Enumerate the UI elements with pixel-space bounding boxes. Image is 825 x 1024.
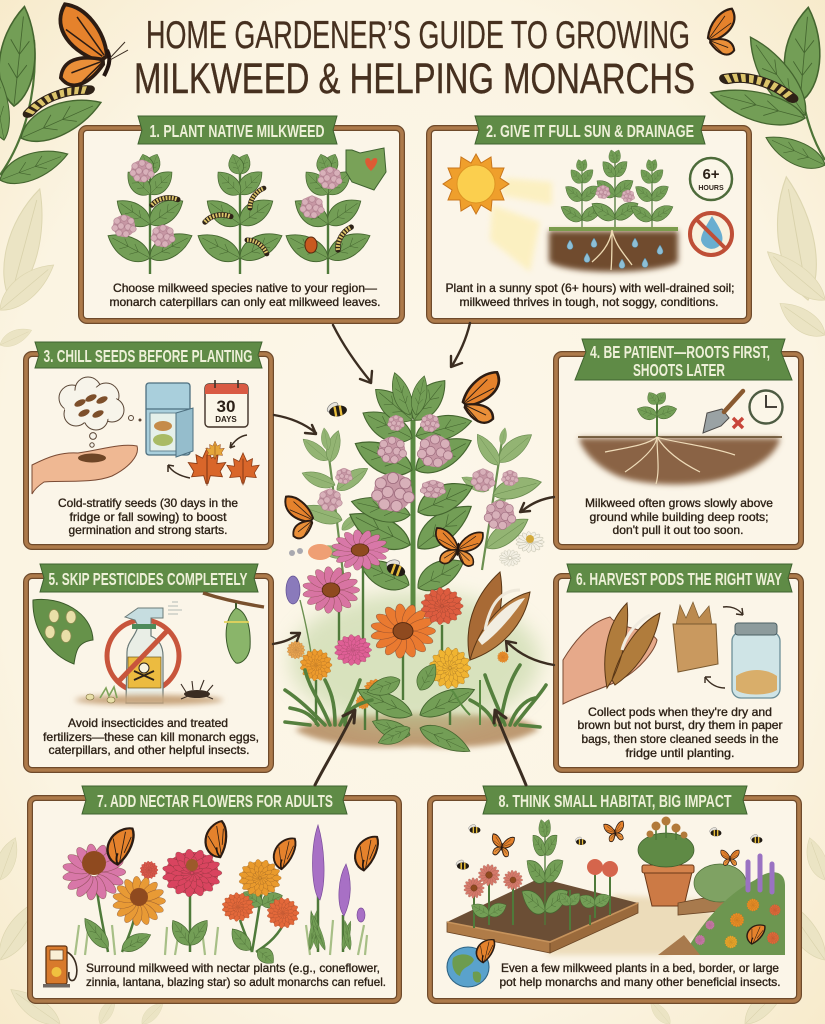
- potted flowers: [638, 816, 694, 906]
- text: step 5: caterpillars, and other helpful insects.: [48, 743, 250, 757]
- text: step 6: brown but not burst, dry them in paper: [578, 718, 782, 732]
- icon: calendar 30 days: 30: [217, 397, 235, 416]
- zinnia: [162, 849, 222, 897]
- icon: seed jar: [732, 623, 780, 698]
- text: step 5: [43, 716, 259, 757]
- milkweed plant with pods and beetle: [281, 152, 375, 274]
- heading: step 5: 5. SKIP PESTICIDES COMPLETELY: [48, 569, 248, 589]
- icon: nectar fuel pump: [43, 946, 77, 988]
- caterpillar on top-right leaf: [726, 72, 794, 98]
- text: step 4: Milkweed often grows slowly above: [585, 496, 773, 510]
- icon: refrigerator: [146, 383, 193, 457]
- heading: step 5: [40, 564, 258, 592]
- arrow: step 4 to plant: [520, 497, 554, 512]
- bees: [324, 399, 409, 579]
- text: step 4: ground while building deep roots;: [590, 510, 768, 524]
- text: step 6: bags, then store cleaned seeds in the: [582, 732, 779, 746]
- icon: hand holding pods: [563, 603, 660, 704]
- grass: [75, 920, 367, 955]
- text: step 7: [86, 961, 386, 989]
- text: step 3: fridge or fall sowing) to boost: [70, 510, 227, 524]
- milkweed plant with caterpillars: [193, 152, 287, 274]
- side milkweed plant left: [299, 427, 371, 590]
- icon: clock: [750, 390, 782, 424]
- icon: branch with chrysalis: [203, 593, 264, 663]
- icon: 6+ hours: HOURS: [698, 185, 724, 192]
- side milkweed plant right: [459, 427, 544, 570]
- soil, eggs and dead insect: [75, 680, 223, 705]
- central milkweed garden illustration: [285, 370, 546, 759]
- panel 6: harvest pods: [556, 564, 801, 770]
- orange coneflower: [370, 603, 436, 659]
- heading: step 7: [82, 786, 347, 814]
- arrow: step 7 to plant: [315, 710, 355, 785]
- nectar flower stems and leaves: [79, 887, 353, 968]
- zinnias: [334, 587, 463, 666]
- icon: calendar 30 days: DAYS: [215, 415, 237, 424]
- butterflies and bees: [455, 821, 762, 870]
- text: step 1: [110, 281, 380, 309]
- ground: [295, 713, 538, 747]
- panel 5: skip pesticides: [26, 564, 271, 770]
- arrow: step 2 to plant: [451, 323, 470, 367]
- text: step 6: Collect pods when they're dry and: [588, 705, 772, 719]
- small wildflowers left: [286, 544, 332, 660]
- text: step 2: Plant in a sunny spot (6+ hours) with well-drained soil;: [446, 281, 734, 295]
- text: step 5: Avoid insecticides and treated: [68, 716, 228, 730]
- icon: paper bag: [673, 602, 718, 672]
- heading: step 6: [567, 564, 792, 592]
- panel 4: be patient: [556, 339, 801, 547]
- icon: leaf with monarch eggs: [33, 599, 93, 664]
- open milkweed seed pod: [468, 572, 530, 660]
- heading: step 3: 3. CHILL SEEDS BEFORE PLANTING: [44, 346, 252, 366]
- background wash: [290, 592, 540, 728]
- flower stems: [316, 565, 450, 730]
- text: step 8: pot help monarchs and many other beneficial insects.: [500, 975, 780, 989]
- panel 8: small habitat: [430, 786, 799, 1001]
- text: step 8: Even a few milkweed plants in a bed, border, or large: [501, 961, 779, 975]
- text: step 1: monarch caterpillars can only eat milkweed leaves.: [110, 295, 380, 309]
- main milkweed stem and leaves: [343, 370, 479, 625]
- orange coneflower: [112, 876, 166, 926]
- monarch butterfly: top right: [702, 8, 744, 58]
- arrow: step 5 to plant: [273, 633, 300, 644]
- heading: step 3: [35, 342, 262, 368]
- text: step 8: [500, 961, 780, 989]
- text: step 3: germination and strong starts.: [68, 523, 227, 537]
- arrow: step 6 to plant: [506, 641, 554, 665]
- raised garden bed with milkweed: [447, 817, 638, 953]
- text: step 3: Cold-stratify seeds (30 days in the: [58, 496, 238, 510]
- icon: autumn leaves: [168, 435, 259, 486]
- text: step 2: milkweed thrives in tough, not soggy, conditions.: [460, 295, 718, 309]
- pink coneflowers: [302, 529, 389, 614]
- decorative milkweed leaves: top right: [707, 6, 825, 176]
- icon: hand holding seeds: [32, 445, 137, 494]
- text: step 4: don't pull it out too soon.: [612, 523, 744, 537]
- icon: calendar 30 days: [205, 380, 248, 427]
- milkweed plant with flowers: [103, 152, 197, 274]
- text: step 2: [446, 281, 734, 309]
- heading: step 8: 8. THINK SMALL HABITAT, BIG IMPACT: [498, 791, 732, 811]
- arrow: step 8 to plant: [494, 710, 526, 785]
- icon: thought bubble with seeds: [59, 377, 142, 447]
- text: step 6: fridge until planting.: [626, 746, 734, 760]
- low grass and basal leaves: [285, 660, 546, 759]
- title: [134, 14, 695, 103]
- soil with roots and seedling: [578, 389, 782, 484]
- heading: step 1: [138, 116, 337, 144]
- caterpillar on top-left leaf: [27, 84, 89, 113]
- text: step 7: Surround milkweed with nectar plants (e.g., coneflower,: [86, 961, 380, 975]
- heading: step 4: [575, 339, 792, 380]
- icon: globe: [447, 937, 495, 987]
- butterfly top right of plant: [460, 372, 505, 425]
- small red bud: [140, 861, 158, 879]
- white daisies: [499, 531, 544, 566]
- panel 2: full sun and drainage: [429, 116, 749, 321]
- text: step 1: Choose milkweed species native to your region—: [113, 281, 377, 295]
- text: step 3: [58, 496, 238, 537]
- lantana flowers: [222, 859, 299, 929]
- heading: step 8: [483, 786, 747, 814]
- text: step 5: fertilizers—these can kill monarch eggs,: [43, 730, 259, 744]
- panel 1: plant native milkweed: [81, 116, 402, 321]
- icon: trowel crossed out: [703, 391, 743, 433]
- icon: sun with rays: [443, 154, 552, 272]
- coneflower: [62, 844, 126, 900]
- garden path: [545, 895, 720, 955]
- arrow: step 3 to plant: [274, 415, 316, 434]
- monarch butterfly: top left: [44, 4, 128, 92]
- heading: step 2: 2. GIVE IT FULL SUN & DRAINAGE: [486, 121, 694, 141]
- border garden: [658, 856, 785, 955]
- heading: step 2: [475, 116, 705, 144]
- blazing star: [312, 825, 365, 922]
- text: step 6: [578, 705, 782, 760]
- icon: crossed-out pesticide spray: [107, 602, 182, 703]
- milkweed plants above soil: [558, 148, 675, 229]
- butterfly left: [285, 497, 313, 538]
- marigolds: [300, 647, 509, 709]
- soil cross-section with water drops: [549, 229, 678, 272]
- icon: no standing water: [690, 213, 732, 255]
- icon: native region map: [346, 148, 386, 190]
- heading: step 1: 1. PLANT NATIVE MILKWEED: [150, 121, 324, 141]
- panel 7: nectar flowers: [30, 786, 399, 1001]
- heading: step 4: SHOOTS LATER: [633, 360, 725, 380]
- icon: 6+ hours: 6+: [702, 166, 720, 183]
- text: step 4: [585, 496, 773, 537]
- panel 3: chill seeds: [26, 342, 271, 547]
- text: step 7: zinnia, lantana, blazing star) so adult monarchs can refuel.: [86, 975, 386, 989]
- butterfly center: [433, 528, 483, 567]
- arrow: step 1 to plant: [333, 325, 372, 383]
- heading: step 7: 7. ADD NECTAR FLOWERS FOR ADULTS: [97, 791, 333, 811]
- icon: 6+ hours: [690, 158, 732, 200]
- decorative milkweed leaves: top left: [0, 5, 107, 191]
- arrows between bag and jar: [705, 607, 743, 688]
- monarch butterflies: [106, 821, 379, 872]
